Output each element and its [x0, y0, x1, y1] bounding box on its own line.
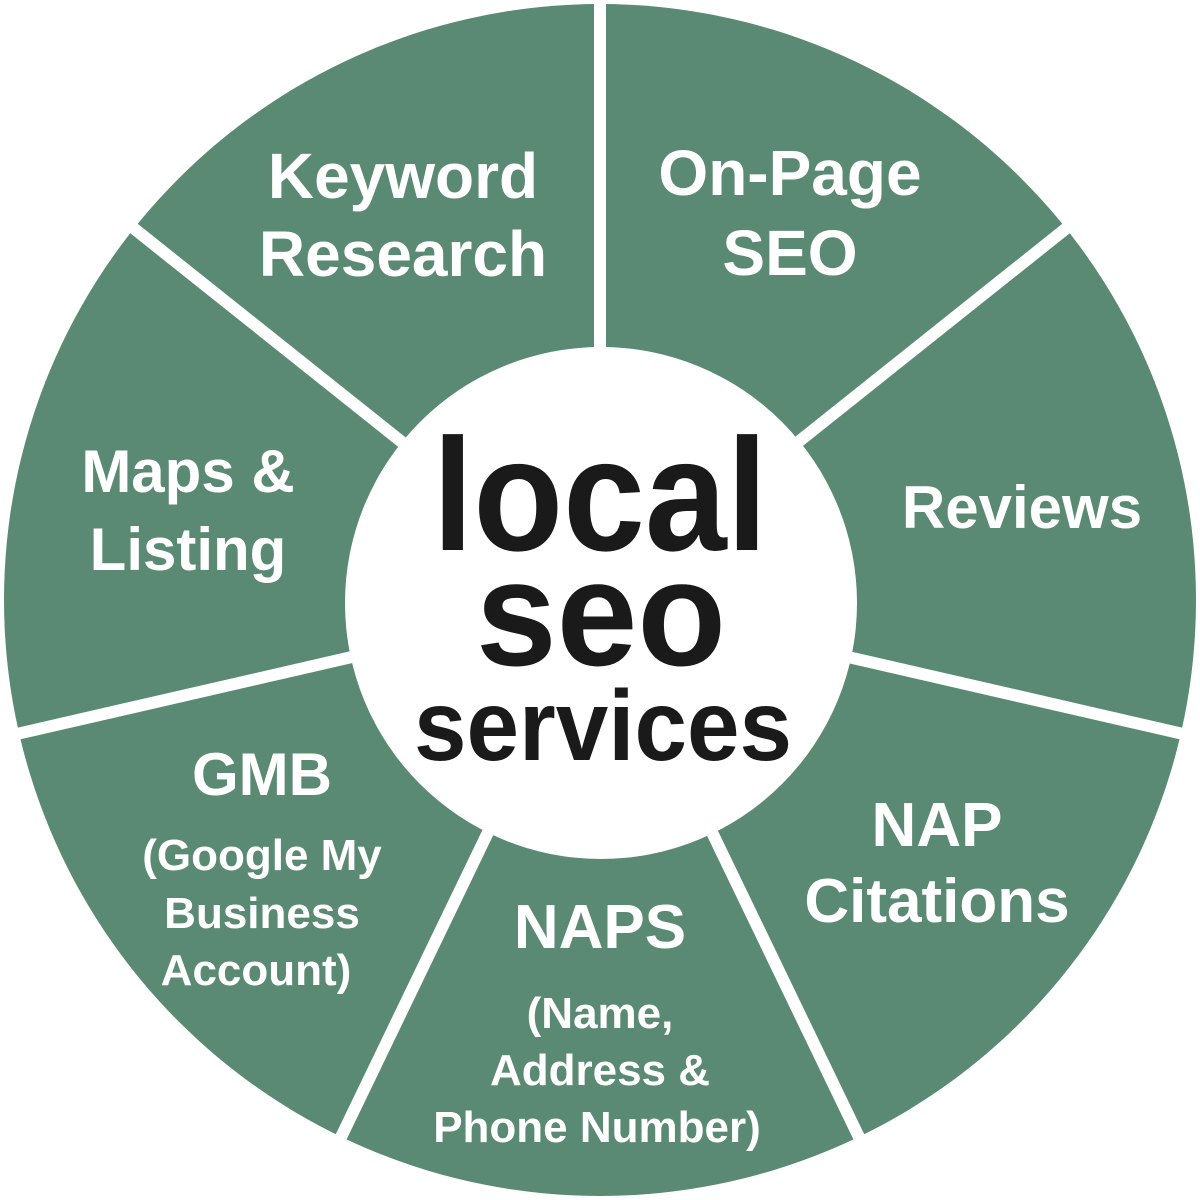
segment: GMB: Account) — [161, 946, 351, 995]
segment: Maps & Listing: Maps & — [81, 438, 295, 505]
segment: On-Page SEO: On-Page — [658, 137, 922, 209]
centre circle — [345, 347, 857, 859]
segment: NAPS — [433, 893, 761, 1152]
centre title: seo — [476, 529, 726, 697]
segment: Keyword Research: Keyword — [268, 140, 538, 212]
centre title: services — [414, 670, 792, 782]
segment: Keyword Research: Research — [259, 218, 547, 290]
segment: NAPS: NAPS — [514, 893, 686, 962]
centre title: local — [432, 405, 768, 584]
segment: NAP Citations: NAP — [872, 791, 1002, 860]
segment: Keyword Research — [259, 140, 547, 290]
segment: On-Page SEO: SEO — [722, 217, 858, 289]
segment: GMB: GMB — [192, 741, 332, 808]
segment: NAPS: (Name, — [527, 989, 673, 1038]
segment: NAPS: Address & — [490, 1046, 710, 1095]
segment: On-Page SEO — [658, 137, 922, 289]
segment: Maps & Listing: Listing — [90, 516, 286, 583]
segment: Reviews: Reviews — [902, 474, 1142, 541]
centre title — [414, 405, 792, 782]
segment: GMB — [142, 741, 382, 995]
segment: NAP Citations: Citations — [804, 867, 1070, 936]
segment: NAPS: Phone Number) — [433, 1103, 761, 1152]
segment: NAP Citations — [804, 791, 1070, 936]
segment: GMB: (Google My — [142, 831, 382, 880]
segment: GMB: Business — [164, 889, 360, 938]
segment: Maps & Listing — [81, 438, 295, 583]
